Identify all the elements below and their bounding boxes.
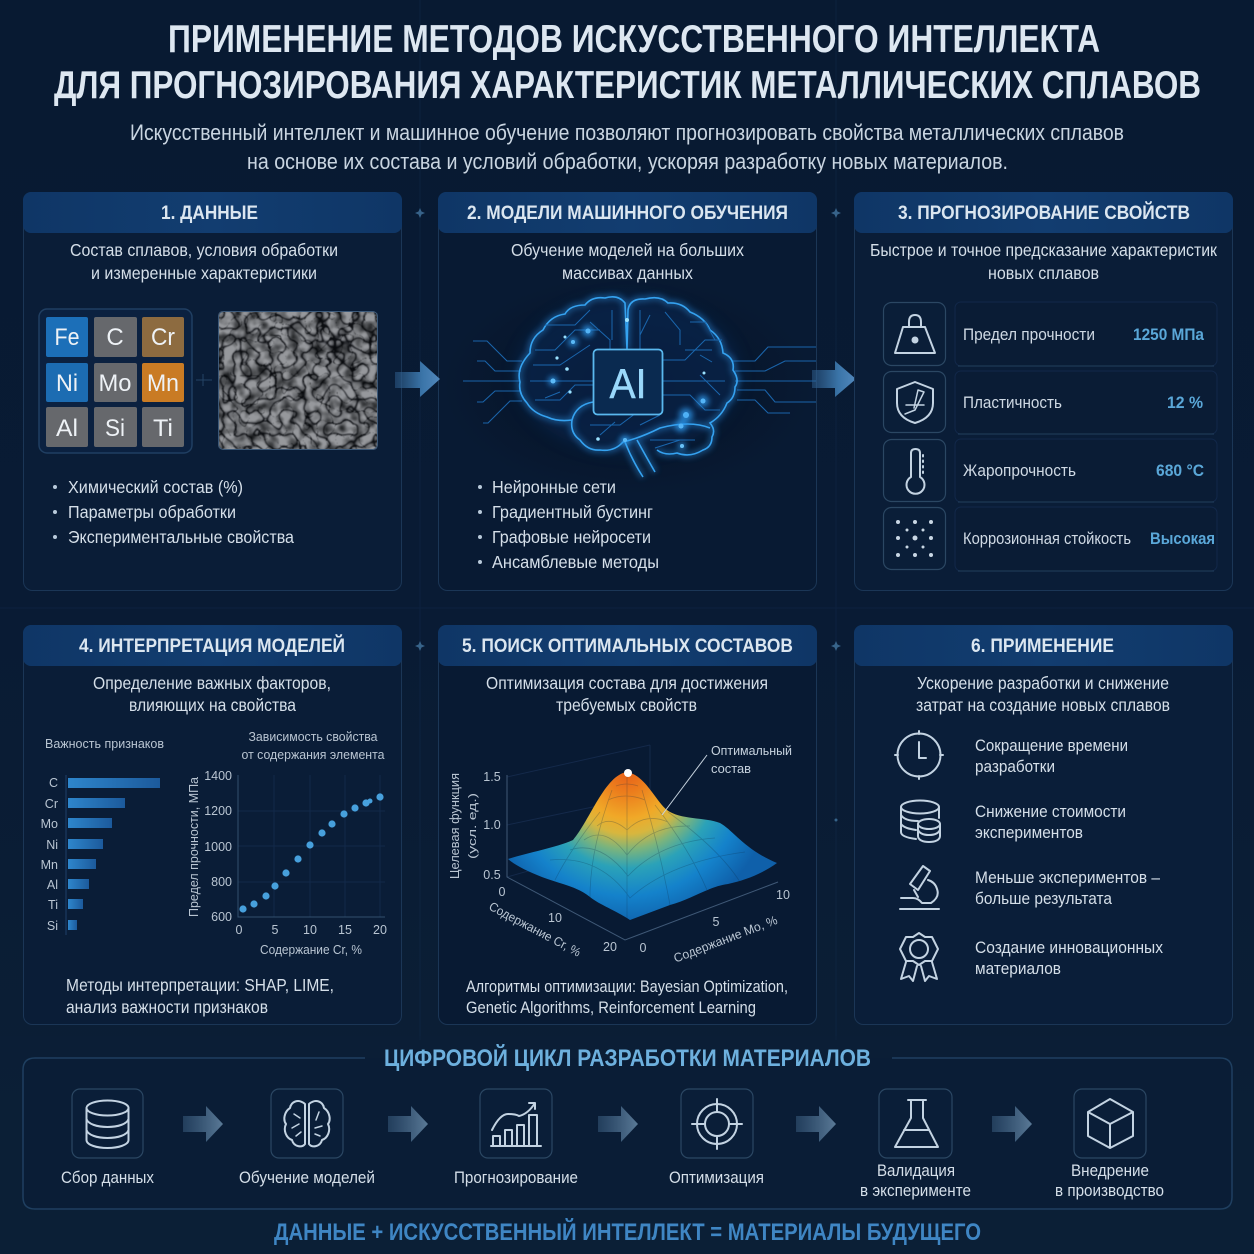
element tiles: Si	[105, 415, 125, 442]
row: ductility	[884, 371, 1217, 434]
AI chip: AI	[610, 360, 646, 407]
heading: 5 optimisation: 5. ПОИСК ОПТИМАЛЬНЫХ СОСТАВОВ	[462, 635, 793, 657]
bullet list: models	[478, 477, 659, 572]
heading: 1 data: 1. ДАННЫЕ	[161, 202, 258, 224]
description: 6 application: затрат на создание новых сплавов	[916, 695, 1170, 715]
panel: 5 optimal compositions	[438, 625, 817, 1024]
step: optimisation	[669, 1089, 764, 1187]
description: 4 interpretation: Определение важных факторов,	[93, 673, 331, 693]
item: fewer experiments: больше результата	[975, 890, 1113, 908]
heading: 5 optimisation	[438, 625, 817, 666]
heading: 6 application: 6. ПРИМЕНЕНИЕ	[971, 635, 1114, 657]
3D surface chart	[448, 743, 792, 966]
element tiles: Fe	[54, 324, 80, 351]
step: validation: Валидация	[877, 1162, 955, 1180]
bullet list: data: Экспериментальные свойства	[68, 527, 294, 547]
row: heat resistance: 680 °C	[1156, 461, 1204, 480]
element tiles: Cr	[151, 324, 175, 351]
bullet list: data: Параметры обработки	[68, 502, 236, 522]
AI chip	[594, 350, 662, 414]
heading: 6 application	[854, 625, 1233, 666]
bullet list: data	[53, 477, 294, 547]
note: optimisation algorithms	[466, 978, 788, 1017]
step: deployment: Внедрение	[1071, 1162, 1149, 1180]
subtitle: Искусственный интеллект и машинное обучение позволяют прогнозировать свойства металлических сплавов	[130, 120, 1124, 145]
icon: growth chart	[491, 1103, 541, 1146]
icon: brain	[284, 1101, 330, 1146]
bar chart: feature importance	[41, 737, 164, 935]
scatter chart: property vs content: 1200	[204, 804, 232, 818]
3D surface chart: Целевая функция	[448, 773, 462, 879]
item: innovative materials: материалов	[975, 960, 1061, 978]
element tiles: Mo	[98, 370, 132, 397]
heading: 4 interpretation	[23, 625, 402, 666]
item: lower cost: экспериментов	[975, 824, 1083, 842]
step: prediction	[454, 1089, 578, 1187]
scatter chart: property vs content: 10	[303, 923, 317, 937]
description: 1 data	[70, 240, 338, 283]
subtitle	[130, 120, 1124, 174]
bar chart: feature importance: Ti	[48, 898, 58, 912]
icon: clock	[895, 731, 943, 779]
bar chart: feature importance: Mn	[41, 858, 58, 872]
title	[54, 18, 1201, 107]
heading: 4 interpretation: 4. ИНТЕРПРЕТАЦИЯ МОДЕЛЕЙ	[79, 633, 345, 657]
icon: coins	[901, 800, 940, 842]
footer slogan: ДАННЫЕ + ИСКУССТВЕННЫЙ ИНТЕЛЛЕКТ = МАТЕРИАЛЫ БУДУЩЕГО	[274, 1218, 981, 1246]
note: interpretation methods: анализ важности признаков	[66, 997, 268, 1017]
heading: 3 prediction	[854, 192, 1233, 233]
step: prediction: Прогнозирование	[454, 1169, 578, 1187]
description: 3 prediction	[870, 240, 1217, 283]
subtitle: на основе их состава и условий обработки, ускоряя разработку новых материалов.	[247, 149, 1008, 174]
scatter chart: property vs content: 5	[272, 923, 279, 937]
scatter chart: property vs content: 600	[211, 910, 232, 924]
row: corrosion resistance: Высокая	[1150, 529, 1215, 548]
heading: 3 prediction: 3. ПРОГНОЗИРОВАНИЕ СВОЙСТВ	[898, 200, 1190, 224]
scatter chart: property vs content: от содержания элемента	[242, 748, 385, 762]
icon: flask	[895, 1100, 938, 1147]
3D surface chart: 1.5	[483, 770, 501, 784]
bar chart: feature importance: Cr	[45, 797, 58, 811]
item: shorter development	[895, 731, 1128, 779]
element tiles: Mn	[147, 370, 179, 397]
3D surface chart: Содержание Cr, %	[487, 899, 583, 960]
3D surface chart: 1.0	[483, 818, 501, 832]
scatter chart: property vs content: 15	[338, 923, 352, 937]
row: tensile strength	[884, 302, 1217, 366]
scatter chart: property vs content: Зависимость свойства	[248, 730, 378, 744]
heading: 2 ml models	[438, 192, 817, 233]
description: 4 interpretation: влияющих на свойства	[129, 695, 296, 715]
item: lower cost: Снижение стоимости	[975, 803, 1126, 821]
step: deployment	[1055, 1089, 1164, 1200]
scatter chart: property vs content: 0	[236, 923, 243, 937]
panel: 6 application	[854, 625, 1233, 1024]
bar chart: feature importance: C	[49, 776, 58, 790]
icon: target	[692, 1099, 742, 1149]
item: fewer experiments: Меньше экспериментов –	[975, 869, 1161, 887]
3D surface chart: 0	[499, 885, 506, 899]
icon: thermometer	[906, 449, 924, 494]
description: 4 interpretation	[93, 673, 331, 715]
description: 2 ml models: массивах данных	[562, 263, 693, 283]
icon: rosette	[900, 933, 938, 981]
icon: AI brain	[443, 275, 816, 495]
item: innovative materials	[900, 933, 1164, 981]
description: 6 application: Ускорение разработки и снижение	[917, 673, 1169, 693]
item: shorter development: разработки	[975, 758, 1055, 776]
description: 6 application	[916, 673, 1170, 715]
row: heat resistance: Жаропрочность	[963, 462, 1076, 480]
scatter chart: property vs content: 1400	[204, 769, 232, 783]
scatter chart: property vs content: 800	[211, 875, 232, 889]
step: model training	[239, 1089, 375, 1187]
bar chart: feature importance: Ni	[46, 838, 58, 852]
step: data collection: Сбор данных	[61, 1169, 155, 1187]
element tiles: Ni	[56, 370, 78, 397]
item: shorter development: Сокращение времени	[975, 737, 1128, 755]
3D surface chart: Оптимальный	[711, 743, 792, 758]
description: 5 optimisation: Оптимизация состава для достижения	[486, 673, 768, 693]
3D surface chart: 0	[640, 941, 647, 955]
icon: shield	[897, 382, 933, 423]
arrow: models to prediction	[812, 361, 856, 397]
element tiles: Al	[56, 415, 78, 442]
3D surface chart: 5	[713, 915, 720, 929]
arrow: step 3 to 4	[598, 1106, 638, 1142]
arrow: step 5 to 6	[992, 1106, 1032, 1142]
row: heat resistance	[884, 439, 1217, 502]
heading: 2 ml models: 2. МОДЕЛИ МАШИННОГО ОБУЧЕНИЯ	[467, 202, 788, 224]
note: optimisation algorithms: Genetic Algorithms, Reinforcement Learning	[466, 999, 756, 1017]
scatter chart: property vs content: 20	[373, 923, 387, 937]
note: optimisation algorithms: Алгоритмы оптимизации: Bayesian Optimization,	[466, 978, 788, 996]
arrow: step 1 to 2	[183, 1106, 223, 1142]
bar chart: feature importance: Al	[47, 878, 58, 892]
row: corrosion resistance	[884, 507, 1217, 571]
3D surface chart: состав	[711, 761, 751, 776]
scatter chart: property vs content: Предел прочности, МПа	[187, 777, 201, 917]
description: 5 optimisation: требуемых свойств	[556, 695, 697, 715]
step: data collection	[61, 1089, 155, 1187]
bullet list: models: Графовые нейросети	[492, 527, 651, 547]
step: deployment: в производство	[1055, 1182, 1164, 1200]
arrow: step 2 to 3	[388, 1106, 428, 1142]
element tiles	[39, 309, 192, 453]
icon: plus sparkle	[196, 374, 212, 386]
row: corrosion resistance: Коррозионная стойкость	[963, 530, 1131, 548]
panel: 3 property prediction	[854, 192, 1233, 590]
panel: 2 ml models	[438, 192, 817, 590]
item: lower cost	[901, 800, 1126, 842]
step: model training: Обучение моделей	[239, 1169, 375, 1187]
element tiles: Ti	[153, 415, 173, 442]
scatter chart: property vs content: Содержание Cr, %	[260, 943, 362, 957]
note: interpretation methods	[66, 975, 334, 1017]
panel: 4 model interpretation	[23, 625, 402, 1024]
panel: 1 data	[23, 192, 402, 590]
item: fewer experiments	[900, 866, 1161, 909]
description: 2 ml models: Обучение моделей на больших	[511, 240, 744, 260]
bullet list: models: Нейронные сети	[492, 477, 616, 497]
panel: digital development cycle	[0, 1036, 1254, 1254]
description: 3 prediction: новых сплавов	[988, 263, 1099, 283]
step: optimisation: Оптимизация	[669, 1169, 764, 1187]
sparkles between panels	[415, 208, 841, 822]
description: 2 ml models	[511, 240, 744, 283]
bullet list: data: Химический состав (%)	[68, 477, 243, 497]
heading: cycle: ЦИФРОВОЙ ЦИКЛ РАЗРАБОТКИ МАТЕРИАЛОВ	[384, 1044, 871, 1072]
3D surface chart: (усл. ед.)	[467, 793, 479, 859]
icon: particle dots	[896, 520, 933, 557]
row: ductility: 12 %	[1167, 393, 1203, 412]
icon: database	[86, 1100, 128, 1148]
description: 1 data: и измеренные характеристики	[91, 263, 317, 283]
3D surface chart: 10	[548, 911, 562, 925]
step: validation	[860, 1089, 971, 1200]
scatter chart: property vs content: 1000	[204, 840, 232, 854]
row: tensile strength: 1250 МПа	[1133, 325, 1204, 344]
element tiles: C	[106, 324, 124, 351]
icon: weight	[895, 315, 935, 353]
description: 1 data: Состав сплавов, условия обработки	[70, 240, 338, 260]
bullet list: models: Градиентный бустинг	[492, 502, 653, 522]
description: 5 optimisation	[486, 673, 768, 715]
note: interpretation methods: Методы интерпретации: SHAP, LIME,	[66, 975, 334, 995]
description: 3 prediction: Быстрое и точное предсказание характеристик	[870, 240, 1217, 260]
bullet list: models: Ансамблевые методы	[492, 552, 659, 572]
row: tensile strength: Предел прочности	[963, 326, 1095, 344]
step: validation: в эксперименте	[860, 1182, 971, 1200]
3D surface chart: 0.5	[483, 868, 501, 882]
micrograph	[218, 311, 378, 450]
scatter chart: property vs content	[187, 730, 387, 957]
icon: cube	[1088, 1099, 1133, 1148]
bar chart: feature importance: Важность признаков	[45, 737, 164, 751]
bar chart: feature importance: Mo	[41, 817, 58, 831]
icon: microscope	[900, 866, 939, 909]
item: innovative materials: Создание инновационных	[975, 939, 1164, 957]
3D surface chart: 10	[776, 888, 790, 902]
arrow: step 4 to 5	[796, 1106, 836, 1142]
3D surface chart: 20	[603, 940, 617, 954]
bar chart: feature importance: Si	[47, 919, 58, 933]
3D surface chart: Содержание Мо, %	[672, 913, 779, 966]
arrow: data to models	[395, 361, 440, 397]
row: ductility: Пластичность	[963, 394, 1062, 412]
heading: 1 data	[23, 192, 402, 233]
